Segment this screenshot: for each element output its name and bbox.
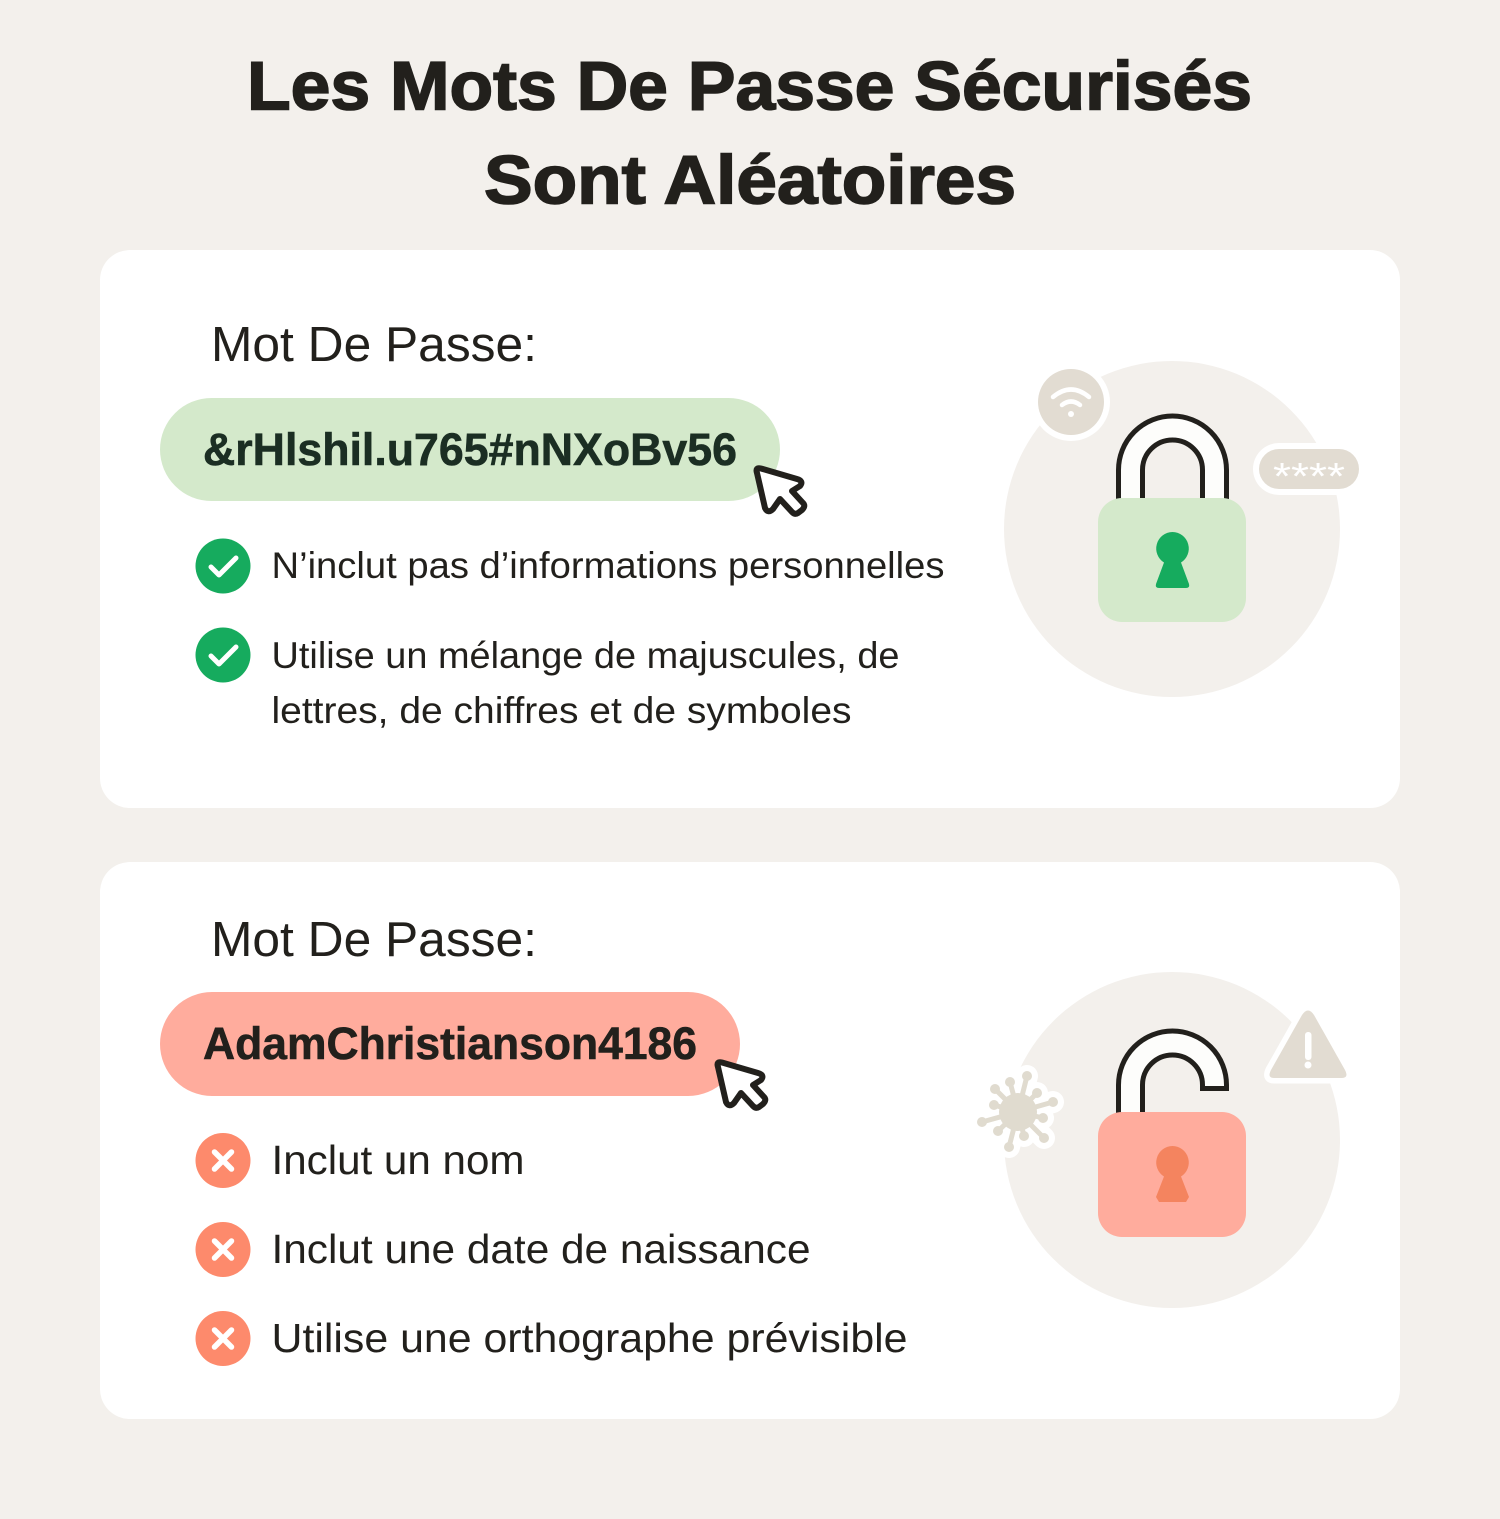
text: criterion 2: Utilise un mélange de majuscules, de bbox=[272, 635, 900, 676]
illustration: open padlock bbox=[977, 972, 1346, 1308]
password pill: weak: AdamChristianson4186 bbox=[203, 1018, 697, 1069]
icon: masked password badge bbox=[1253, 443, 1365, 498]
password pill: strong bbox=[160, 398, 780, 501]
text: criterion 1: Inclut un nom bbox=[272, 1137, 524, 1183]
icon: keyhole bbox=[1156, 532, 1189, 588]
icon: virus bbox=[977, 1071, 1058, 1152]
text: criterion 2: Inclut une date de naissance bbox=[272, 1226, 810, 1272]
icon: open shackle bbox=[1118, 1031, 1226, 1116]
icon: keyhole bbox=[1156, 1146, 1189, 1202]
text: criterion 3: Utilise une orthographe prévisible bbox=[272, 1315, 908, 1361]
heading: password label: Mot De Passe: bbox=[211, 318, 537, 372]
icon: cross 3 bbox=[196, 1311, 250, 1366]
icon: warning triangle bbox=[1270, 1010, 1346, 1078]
text: criterion 2 bbox=[272, 635, 900, 731]
password pill: strong: &rHlshil.u765#nNXoBv56 bbox=[203, 424, 737, 475]
password pill: weak bbox=[160, 992, 740, 1096]
icon: check 2 bbox=[196, 628, 250, 682]
panel: strong password bbox=[100, 250, 1400, 808]
text: criterion 2: lettres, de chiffres et de symboles bbox=[272, 690, 852, 731]
icon: cursor bbox=[756, 468, 804, 514]
illustration: closed padlock bbox=[1004, 361, 1365, 697]
icon: closed shackle bbox=[1130, 428, 1214, 500]
icon: cursor bbox=[718, 1062, 765, 1108]
icon: lock body bbox=[1098, 1112, 1246, 1237]
icon: wifi badge bbox=[1032, 363, 1110, 441]
icon: lock body bbox=[1098, 498, 1246, 622]
icon: cross 1 bbox=[196, 1133, 250, 1188]
text: criterion 1: N’inclut pas d’informations personnelles bbox=[272, 545, 944, 586]
icon: masked password badge: **** bbox=[1273, 456, 1345, 498]
icon: cross 2 bbox=[196, 1222, 250, 1277]
title: Les Mots De Passe Sécurisés bbox=[247, 48, 1252, 124]
icon: check 1 bbox=[196, 538, 250, 594]
title bbox=[247, 48, 1252, 218]
panel: weak password bbox=[100, 862, 1400, 1419]
title: Sont Aléatoires bbox=[484, 142, 1016, 218]
heading: password label: Mot De Passe: bbox=[211, 913, 537, 967]
